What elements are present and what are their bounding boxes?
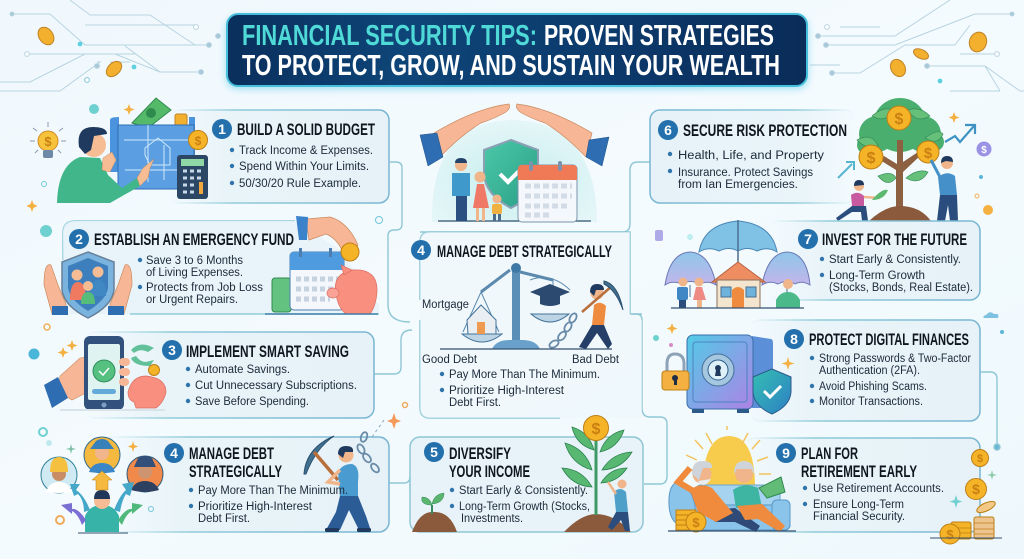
- title banner: [226, 14, 808, 89]
- panel 6: secure risk protection: [650, 98, 993, 221]
- number badge 5: 5: [430, 444, 438, 460]
- bullets 9: Use Retirement Accounts.: [813, 483, 944, 495]
- number badge 2: [69, 229, 89, 249]
- panel 2: emergency fund: [40, 216, 382, 318]
- number badge 3: [162, 340, 182, 360]
- title line 1: FINANCIAL SECURITY TIPS:: [242, 20, 537, 52]
- panel 3: smart saving: [28, 324, 374, 418]
- heading 1: BUILD A SOLID BUDGET: [237, 120, 375, 139]
- heading 5: YOUR INCOME: [449, 462, 530, 481]
- number badge 4 center: [411, 240, 431, 260]
- bullets 9: Ensure Long-Term: [813, 499, 904, 511]
- illustration: umbrellas over house and family: [655, 220, 810, 308]
- bullets 2: [138, 255, 263, 306]
- number badge 6: 6: [664, 122, 672, 138]
- scale label: bad debt: Bad Debt: [572, 354, 620, 366]
- number badge 1: 1: [218, 121, 226, 137]
- number badge 7: [798, 229, 818, 249]
- number badge 9: [776, 443, 796, 463]
- illustration: retired couple on sofa with sun: [668, 426, 796, 532]
- bullets 6: Health, Life, and Property: [678, 150, 824, 162]
- title line 2: TO PROTECT, GROW, AND SUSTAIN YOUR WEALTH: [242, 50, 780, 82]
- bullets 5: [450, 485, 590, 525]
- bullets 8: Avoid Phishing Scams.: [819, 381, 927, 393]
- circuit lines: top left: [0, 0, 220, 91]
- heading 9: PLAN FOR: [801, 444, 858, 463]
- illustration: man breaking chain with pickaxe: [304, 402, 408, 532]
- illustration: coins stacks at right: [930, 450, 1002, 544]
- title line 1: PROVEN STRATEGIES: [544, 20, 774, 52]
- bullets 3: Cut Unnecessary Subscriptions.: [195, 380, 357, 392]
- bullets 1: [230, 145, 373, 190]
- illustration: man with blueprint: [26, 98, 208, 212]
- illustration: money plant with coin and person: [562, 416, 632, 532]
- bullets 6: Insurance. Protect Savings: [678, 167, 813, 179]
- illustration: protecting hands, family, shield and calendar: [420, 104, 609, 222]
- illustration: coins stacks at right: $: [972, 481, 980, 497]
- bullets 5: Start Early & Consistently.: [459, 485, 588, 497]
- bullets 9: Financial Security.: [813, 511, 905, 523]
- number badge 8: [784, 329, 804, 349]
- bullets 4: Debt First.: [198, 513, 250, 525]
- panel 9: plan for retirement early: [668, 426, 1002, 544]
- connector lines between panels: [374, 162, 1000, 490]
- number badge 4: 4: [170, 445, 178, 461]
- bullets center: [440, 369, 600, 409]
- panel 1: build a solid budget: [26, 98, 389, 212]
- illustration: career paths people: [39, 428, 163, 533]
- heading 4: [189, 444, 282, 481]
- heading 9: RETIREMENT EARLY: [801, 462, 917, 481]
- panel: manage debt strategically (center): [411, 232, 642, 418]
- panel 5: diversify your income: [410, 416, 643, 532]
- number badge 4: [164, 443, 184, 463]
- scale label: mortgage: Mortgage: [422, 299, 469, 311]
- bullets 3: Save Before Spending.: [195, 396, 309, 408]
- heading center: MANAGE DEBT STRATEGICALLY: [437, 242, 612, 261]
- bullets 5: Investments.: [461, 513, 523, 525]
- panel 8: protect digital finances: [653, 312, 1004, 421]
- scale label: good debt: Good Debt: [422, 354, 478, 366]
- coins top right: [887, 30, 989, 79]
- panel 7: invest for the future: [655, 220, 980, 308]
- number badge 8: 8: [790, 331, 798, 347]
- number badge 9: 9: [782, 445, 790, 461]
- illustration: retired couple on sofa with sun: $: [692, 515, 700, 530]
- number badge 4 center: 4: [417, 242, 425, 258]
- illustration: coin tree with two people: $: [895, 111, 904, 128]
- heading 5: DIVERSIFY: [449, 444, 511, 463]
- illustration: sprout in soil: [412, 493, 457, 532]
- illustration: shield and protecting hands: [40, 216, 382, 318]
- bullets center: Debt First.: [449, 397, 501, 409]
- bullets 2: Save 3 to 6 Months: [146, 255, 243, 267]
- illustration: coin tree with two people: $: [867, 150, 876, 167]
- bullets 9: [803, 483, 944, 523]
- bullets 8: Monitor Transactions.: [819, 396, 923, 408]
- number badge 2: 2: [75, 231, 83, 247]
- illustration: man with blueprint: $: [195, 134, 202, 148]
- heading 9: [801, 444, 917, 481]
- coins top left: [35, 24, 125, 80]
- number badge 5: [424, 442, 444, 462]
- bullets 6: from Ian Emergencies.: [678, 179, 798, 191]
- illustration: balance scale with house and graduation cap: [440, 263, 623, 349]
- illustration: phone and piggy bank: [28, 324, 166, 410]
- bullets 4: Pay More Than The Minimum.: [198, 485, 348, 497]
- bullets 8: [810, 353, 971, 408]
- number badge 3: 3: [168, 342, 176, 358]
- bullets 6: [668, 150, 824, 191]
- illustration: safe, padlock and shield: [653, 312, 1004, 414]
- heading 4: STRATEGICALLY: [189, 462, 282, 481]
- bullets center: Prioritize High-Interest: [449, 385, 565, 397]
- bullets 2: or Urgent Repairs.: [146, 294, 238, 306]
- bullets 8: Authentication (2FA).: [819, 365, 920, 377]
- panel 4: manage debt strategically: [39, 402, 408, 533]
- illustration: coins stacks at right: $: [946, 527, 954, 542]
- bullets 1: Track Income & Expenses.: [239, 145, 373, 157]
- bullets 8: Strong Passwords & Two-Factor: [819, 353, 971, 365]
- number badge 7: 7: [804, 231, 812, 247]
- bullets 7: [820, 254, 973, 294]
- bullets 7: Long-Term Growth: [829, 270, 925, 282]
- illustration: coin tree with two people: $: [981, 145, 987, 156]
- bullets 5: Long-Term Growth (Stocks,: [459, 501, 590, 513]
- bullets 2: Protects from Job Loss: [146, 282, 263, 294]
- bullets 4: [189, 485, 348, 525]
- bullets 3: Automate Savings.: [195, 364, 290, 376]
- illustration: man with blueprint: $: [44, 134, 52, 149]
- heading 3: IMPLEMENT SMART SAVING: [186, 342, 349, 361]
- number badge 1: [212, 119, 232, 139]
- circuit lines: top right: [810, 0, 1024, 91]
- illustration: money plant with coin and person: $: [592, 421, 601, 438]
- illustration: coin tree with two people: [836, 98, 993, 221]
- bullets 1: 50/30/20 Rule Example.: [239, 178, 361, 190]
- heading 2: ESTABLISH AN EMERGENCY FUND: [94, 230, 294, 249]
- heading 5: [449, 444, 530, 481]
- bullets 3: [186, 364, 357, 408]
- heading 6: SECURE RISK PROTECTION: [683, 121, 847, 140]
- illustration: coin tree with two people: $: [924, 145, 933, 162]
- number badge 6: [658, 120, 678, 140]
- bullets 7: (Stocks, Bonds, Real Estate).: [829, 282, 973, 294]
- bullets 2: of Living Expenses.: [146, 267, 243, 279]
- bullets 7: Start Early & Consistently.: [829, 254, 961, 266]
- illustration: coins stacks at right: $: [977, 453, 983, 465]
- bullets 4: Prioritize High-Interest: [198, 501, 313, 513]
- heading 4: MANAGE DEBT: [189, 444, 274, 463]
- bullets center: Pay More Than The Minimum.: [449, 369, 600, 381]
- bullets 1: Spend Within Your Limits.: [239, 161, 369, 173]
